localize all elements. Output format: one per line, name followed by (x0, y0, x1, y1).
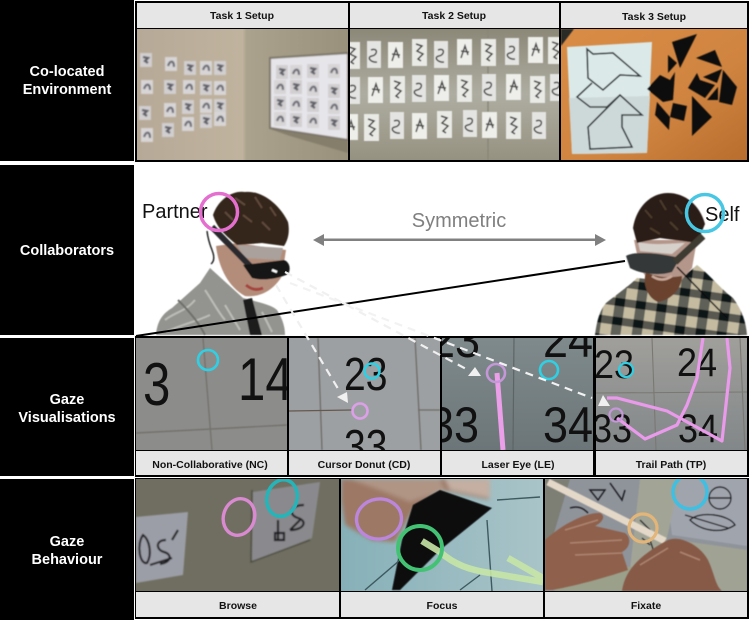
row label: Gaze Behaviour: Gaze (50, 534, 84, 550)
panel: gaze behaviour (135, 475, 749, 619)
row label: Co-located Environment (0, 0, 134, 161)
caption: Laser Eye (LE): Laser Eye (LE) (482, 459, 554, 471)
double-headed arrow: symmetric (313, 234, 606, 246)
row label: Gaze Behaviour: Behaviour (32, 552, 103, 568)
caption: Laser Eye (LE) (442, 451, 593, 475)
view: Trail Path: 33 (592, 407, 632, 451)
gaze ring: partner pink (200, 194, 238, 230)
view: Trail Path: 34 (678, 407, 718, 451)
header: Task 1 Setup (137, 3, 348, 28)
view: Non-Collaborative: 3 (143, 350, 170, 418)
view: Cursor Donut: 23 (344, 349, 387, 401)
caption: Non-Collaborative (NC) (136, 451, 287, 475)
label: Symmetric: Symmetric (412, 210, 506, 232)
photo: Task 2 wall of cards (343, 29, 564, 160)
view: Cursor Donut (289, 338, 440, 473)
view: Non-Collaborative (136, 338, 293, 450)
caption: Fixate: Fixate (631, 600, 661, 612)
view: Laser Eye: 23 (430, 313, 480, 369)
caption: Trail Path (TP): Trail Path (TP) (636, 459, 706, 471)
header: Task 3 Setup (561, 3, 747, 28)
connector line between collaborators (136, 261, 625, 336)
view: Trail Path: 24 (677, 341, 717, 385)
caption: Non-Collaborative (NC): Non-Collaborative (NC) (152, 459, 268, 471)
row label: Co-located Environment: Co-located (30, 64, 104, 80)
panel: task setups (135, 1, 749, 162)
view: Browse (136, 476, 339, 591)
row label: Gaze Visualisations: Visualisations (18, 410, 116, 426)
photo: Task 1 wall and whiteboard (137, 29, 348, 160)
view: Cursor Donut: 33 (344, 421, 387, 473)
label: Self: Self (705, 204, 740, 226)
caption: Cursor Donut (CD) (289, 451, 440, 475)
caption: Focus (341, 592, 543, 617)
header: Task 3 Setup: Task 3 Setup (622, 11, 686, 23)
person: partner wearing headset (156, 192, 290, 335)
view: Trail Path: 23 (594, 343, 634, 387)
caption: Cursor Donut (CD): Cursor Donut (CD) (318, 459, 410, 471)
row label: Collaborators: Collaborators (20, 243, 114, 259)
label: Partner: Partner (142, 201, 208, 223)
caption: Browse: Browse (219, 600, 257, 612)
view: Focus (341, 479, 543, 591)
row label: Co-located Environment: Environment (23, 82, 111, 98)
view: Laser Eye: 33 (429, 398, 479, 454)
view: Laser Eye (429, 313, 593, 454)
row label: Gaze Visualisations (0, 338, 134, 476)
view: Non-Collaborative: 14 (238, 345, 293, 413)
row label: Collaborators (0, 165, 134, 335)
view: Laser Eye: 34 (543, 398, 593, 454)
header: Task 2 Setup (350, 3, 559, 28)
panel: gaze visualisations (135, 313, 749, 477)
row label: Gaze Behaviour (0, 479, 134, 620)
header: Task 1 Setup: Task 1 Setup (210, 10, 274, 22)
view: Laser Eye: 24 (543, 313, 593, 369)
row label: Gaze Visualisations: Gaze (50, 392, 84, 408)
caption: Focus: Focus (427, 600, 458, 612)
person: self wearing headset (595, 193, 747, 335)
header: Task 2 Setup: Task 2 Setup (422, 10, 486, 22)
caption: Browse (136, 592, 339, 617)
caption: Trail Path (TP) (596, 451, 747, 475)
dashed gaze arrows from partner to each view (276, 272, 610, 406)
view: Trail Path (592, 338, 747, 451)
photo: Task 3 tangram puzzle (561, 29, 747, 160)
gaze ring: self cyan (686, 194, 724, 232)
view: Fixate (545, 475, 747, 591)
caption: Fixate (545, 592, 747, 617)
